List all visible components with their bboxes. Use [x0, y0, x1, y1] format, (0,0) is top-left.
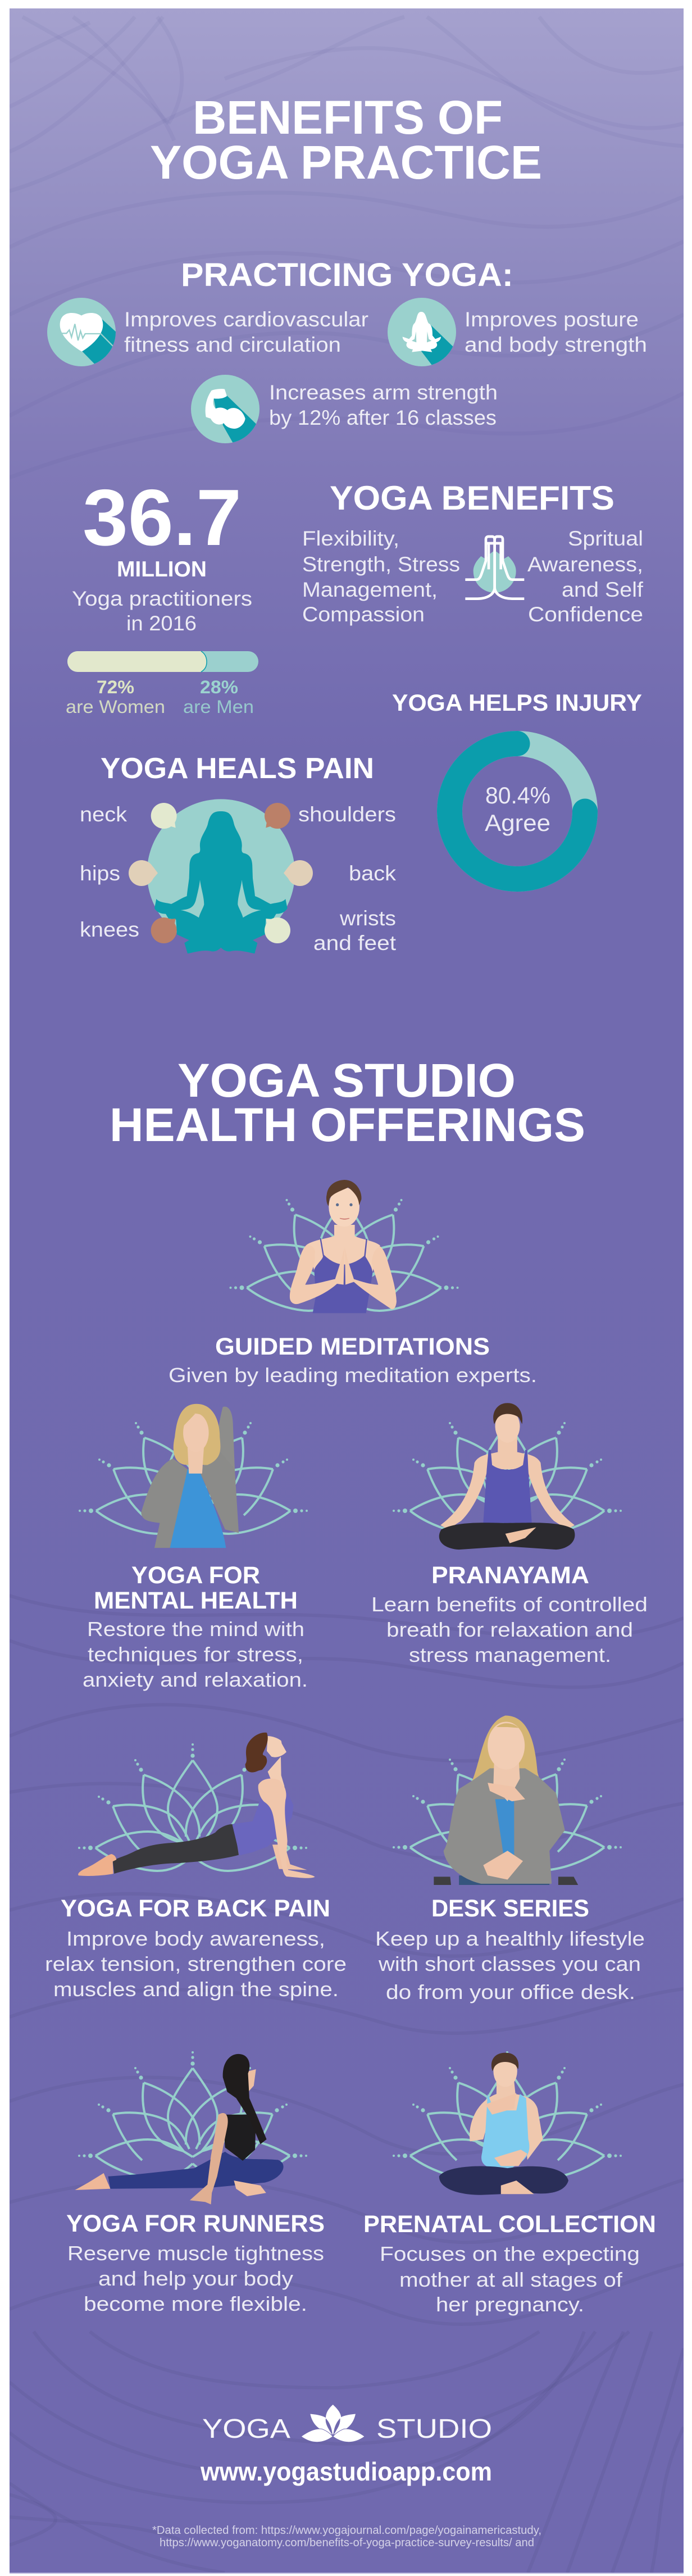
logo: yoga studio: STUDIO — [376, 2414, 492, 2444]
stat: 36.7 million: MILLION — [117, 557, 207, 581]
description — [83, 1618, 308, 1691]
figure: silhouette with pain points — [129, 799, 313, 953]
text: benefits right: Awareness, — [527, 553, 643, 576]
text: benefits right: Spritual — [568, 527, 643, 550]
description — [375, 1927, 645, 2003]
labels: pain points: and feet — [313, 932, 397, 955]
labels: pain points: knees — [80, 918, 139, 941]
labels: pain points: wrists — [339, 907, 396, 930]
text: benefits right: and Self — [562, 578, 644, 601]
card: desk series — [375, 1715, 645, 2003]
title: YOGA FOR RUNNERS — [66, 2210, 325, 2237]
footnote: https://www.yoganatomy.com/benefits-of-yoga-practice-survey-results/ and — [160, 2537, 534, 2549]
heading: yoga heals pain: YOGA HEALS PAIN — [101, 752, 374, 785]
icon: heart — [47, 298, 116, 366]
bubble: neck — [151, 803, 177, 829]
footnote — [152, 2524, 541, 2549]
logo: yoga studio: YOGA — [202, 2414, 290, 2444]
lotus outline — [393, 1406, 622, 1534]
donut chart: 80.4% agree: 80.4% — [485, 782, 550, 808]
text: benefits left: Flexibility, — [302, 527, 399, 550]
description — [45, 1927, 347, 2001]
text: posture — [465, 308, 647, 356]
panel: yoga helps injury — [392, 689, 642, 879]
description — [67, 2242, 324, 2315]
logo: yoga studio — [202, 2405, 492, 2444]
description — [371, 1593, 648, 1666]
title: PRANAYAMA — [431, 1562, 589, 1589]
description: muscles and align the spine. — [53, 1978, 339, 2001]
icon: flexed arm — [191, 375, 260, 443]
labels: pain points: hips — [80, 862, 120, 885]
stat: 36.7 million — [72, 473, 252, 635]
title: YOGA PRACTICE — [150, 136, 542, 189]
title: MENTAL HEALTH — [94, 1587, 298, 1614]
text: benefits right — [527, 527, 644, 626]
description — [380, 2242, 640, 2316]
lotus outline — [229, 1183, 458, 1311]
description: with short classes you can — [378, 1952, 641, 1975]
photo: woman in namaste — [290, 1180, 397, 1313]
description: become more flexible. — [84, 2292, 307, 2315]
heading: yoga helps injury: YOGA HELPS INJURY — [392, 689, 642, 716]
photo: woman in grey cardigan — [141, 1404, 239, 1548]
bar chart: women vs men: are Women — [66, 697, 165, 717]
bar chart: women vs men — [66, 651, 258, 717]
donut chart: 80.4% agree — [449, 744, 585, 879]
bubble: hips — [129, 860, 158, 886]
text: benefits left: Management, — [302, 578, 438, 601]
bubble: shoulders — [265, 803, 290, 829]
website url: www.yogastudioapp.com — [200, 2457, 492, 2486]
description: do from your office desk. — [386, 1980, 635, 2003]
labels: pain points: neck — [80, 803, 128, 826]
bubble: wrists — [265, 917, 290, 943]
title: BENEFITS OF — [193, 91, 503, 144]
text: cardiovascular: fitness and circulation — [124, 333, 341, 356]
title: YOGA FOR BACK PAIN — [61, 1895, 330, 1922]
description: Reserve muscle tightness — [67, 2242, 324, 2265]
labels: pain points: back — [349, 862, 397, 885]
text: posture: Improves posture — [465, 308, 639, 331]
stat: 36.7 million: 36.7 — [83, 473, 242, 562]
title — [150, 91, 542, 189]
description: her pregnancy. — [436, 2293, 584, 2316]
heading: yoga studio health offerings: YOGA STUDIO — [177, 1054, 516, 1107]
text: benefits left: Compassion — [302, 603, 425, 626]
bar chart: women vs men: are Men — [183, 697, 254, 717]
description: Learn benefits of controlled — [371, 1593, 648, 1616]
description: Given by leading meditation experts. — [169, 1364, 537, 1387]
lotus outline — [393, 2051, 622, 2179]
photo: woman in cobra pose — [78, 1733, 315, 1878]
description: and help your body — [98, 2267, 293, 2290]
lotus outline — [79, 1406, 308, 1534]
description: relax tension, strengthen core — [45, 1952, 347, 1975]
text: cardiovascular — [124, 308, 368, 356]
heading: yoga studio health offerings — [110, 1054, 585, 1151]
panel: yoga heals pain — [80, 752, 397, 955]
bubble: back — [284, 860, 313, 886]
text: posture: and body strength — [465, 333, 647, 356]
description: breath for relaxation and — [386, 1618, 633, 1641]
labels: pain points: shoulders — [298, 803, 396, 826]
stat: 36.7 million: Yoga practitioners — [72, 587, 252, 610]
description: Restore the mind with — [87, 1618, 304, 1641]
photo: woman at desk — [434, 1715, 578, 1885]
icon: meditating figure — [388, 298, 459, 371]
donut chart: 80.4% agree: Agree — [485, 810, 550, 836]
text: benefits right: Confidence — [528, 603, 643, 626]
icon: lotus logo — [301, 2405, 365, 2442]
heading: yoga benefits: YOGA BENEFITS — [330, 479, 614, 517]
heading: practicing yoga: PRACTICING YOGA: — [181, 257, 513, 293]
bubble: knees — [151, 917, 177, 943]
title: YOGA FOR — [131, 1562, 260, 1589]
title: PRENATAL COLLECTION — [363, 2211, 656, 2238]
panel: yoga benefits — [302, 479, 644, 626]
photo: woman seated cross-legged — [439, 1403, 575, 1550]
card: guided meditations — [169, 1180, 537, 1387]
text: benefits left: Strength, Stress — [302, 553, 460, 576]
text: arm strength: Increases arm strength — [269, 381, 498, 404]
card: yoga for back pain — [45, 1733, 347, 2001]
lotus outline — [78, 1743, 307, 1871]
title: DESK SERIES — [431, 1895, 589, 1922]
bar chart: women vs men: 72% — [97, 677, 134, 697]
photo: pregnant woman seated — [439, 2053, 568, 2195]
card: pranayama — [371, 1403, 648, 1666]
text: benefits left — [302, 527, 460, 626]
text: cardiovascular: Improves cardiovascular — [124, 308, 368, 331]
description: Focuses on the expecting — [380, 2242, 640, 2265]
text: arm strength — [269, 381, 498, 429]
title — [94, 1562, 298, 1614]
icon: praying hands — [465, 537, 524, 599]
description: stress management. — [409, 1643, 611, 1666]
heading: yoga studio health offerings: HEALTH OFFERINGS — [110, 1098, 585, 1151]
lotus outline — [393, 1743, 622, 1870]
stat: 36.7 million: in 2016 — [126, 612, 197, 635]
description: techniques for stress, — [88, 1643, 303, 1666]
title: GUIDED MEDITATIONS — [215, 1333, 490, 1360]
footnote: *Data collected from: https://www.yogajournal.com/page/yogainamericastudy, — [152, 2524, 541, 2537]
labels: pain points — [80, 803, 397, 955]
card: prenatal collection — [363, 2051, 656, 2316]
bar chart: women vs men: 28% — [200, 677, 238, 697]
lotus outline — [78, 2051, 307, 2179]
description: mother at all stages of — [399, 2268, 623, 2291]
card: yoga for mental health — [79, 1404, 308, 1691]
text: arm strength: by 12% after 16 classes — [269, 406, 497, 429]
photo: woman in pigeon pose — [75, 2054, 284, 2205]
card: yoga for runners — [66, 2051, 325, 2315]
description: Keep up a healthly lifestyle — [375, 1927, 645, 1950]
description: Improve body awareness, — [66, 1927, 325, 1950]
description: anxiety and relaxation. — [83, 1668, 308, 1691]
